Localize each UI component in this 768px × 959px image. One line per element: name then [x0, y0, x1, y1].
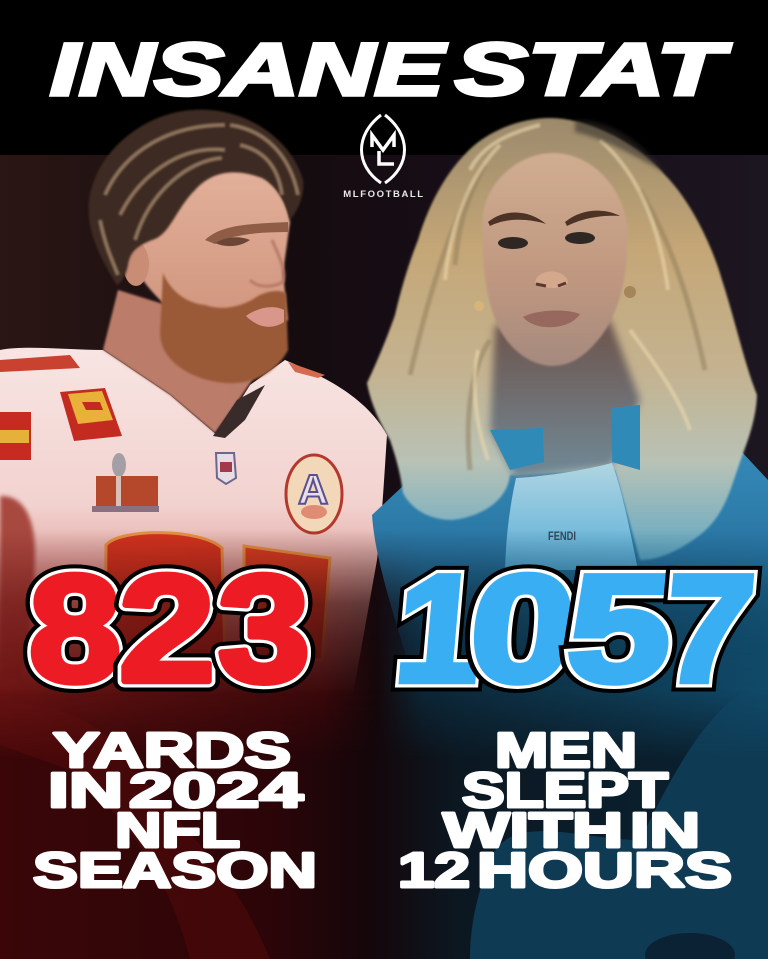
digit 0: 0: [464, 544, 582, 714]
photo: football player: [0, 110, 387, 700]
caption: men: MEN: [495, 724, 637, 778]
caption: yards: YARDS: [53, 724, 291, 778]
player collar: [213, 385, 265, 438]
player hair: [89, 110, 303, 285]
right collar: [611, 405, 640, 470]
caption: yards: [33, 724, 317, 898]
digit 8: 8: [29, 544, 121, 714]
player neck: [103, 290, 280, 433]
nose: [535, 272, 568, 288]
caption: men: IN: [630, 804, 700, 858]
face: [482, 153, 628, 366]
shoulder trim left: [0, 355, 80, 372]
caption: yards: 2024: [129, 764, 303, 818]
player hair highlights: [100, 125, 298, 275]
digit 8: 8: [29, 544, 121, 714]
right eye: [565, 232, 595, 244]
blue background shape: [470, 690, 768, 959]
player nose shadow: [250, 240, 284, 286]
neck shadow: [490, 320, 640, 478]
title: INSANE: [50, 28, 448, 111]
caption: yards: NFL: [115, 804, 240, 858]
caption: yards: SEASON: [33, 844, 317, 898]
photo: woman: [367, 118, 768, 700]
shirt logo: FENDI: [548, 529, 576, 543]
digit 5: 5: [562, 544, 678, 714]
bottom fade: [0, 690, 768, 959]
hair: [367, 118, 757, 560]
digit 8: 8: [29, 544, 121, 714]
digit 1: 1: [390, 544, 488, 714]
stat number: 1057: [390, 544, 760, 714]
digit 0: 0: [464, 544, 582, 714]
title: STAT: [455, 28, 732, 111]
player arm: [0, 496, 35, 680]
digit 3: 3: [218, 544, 310, 714]
left brow: [488, 212, 546, 226]
mid fade: [0, 534, 768, 752]
digit 2: 2: [119, 544, 215, 714]
left collar: [490, 428, 544, 470]
caption: men: 12: [398, 844, 470, 898]
right brow: [565, 211, 620, 226]
player beard: [160, 273, 288, 383]
player eye: [215, 237, 250, 246]
caption: men: [398, 724, 732, 898]
left eye: [498, 237, 528, 249]
digit 3: 3: [218, 544, 310, 714]
shoulder trim right: [288, 362, 325, 378]
digit 7: 7: [658, 544, 760, 714]
player face: [135, 165, 290, 345]
caption: men: WITH: [443, 804, 623, 858]
lips: [523, 310, 580, 327]
top black band: [0, 0, 768, 155]
digit 5: 5: [562, 544, 678, 714]
digit 7: 7: [658, 544, 760, 714]
hair strands dark: [410, 165, 705, 470]
digit 5: 5: [562, 544, 678, 714]
nostrils: [536, 283, 566, 286]
digit 1: 1: [390, 544, 488, 714]
conference patch: [286, 455, 342, 533]
digit 1: 1: [390, 544, 488, 714]
hair strands light: [445, 125, 690, 460]
jersey number first digit: [105, 533, 225, 660]
caption: yards: IN: [48, 764, 123, 818]
earring right: [624, 286, 636, 298]
dark ellipse: [645, 933, 735, 959]
digit 2: 2: [119, 544, 215, 714]
title: [50, 28, 732, 111]
captain patch: [60, 388, 122, 441]
digit 7: 7: [658, 544, 760, 714]
conference patch: A: [298, 466, 328, 513]
jersey number second digit: [244, 546, 330, 660]
shoulder stripe: [0, 412, 31, 460]
logo: [343, 115, 425, 200]
player jersey: [0, 348, 387, 700]
earring left: [474, 301, 484, 311]
player ear: [123, 242, 149, 286]
shirt: [505, 463, 638, 570]
caption: men: HOURS: [477, 844, 732, 898]
player lips: [246, 307, 284, 327]
digit 3: 3: [218, 544, 310, 714]
jacket: [372, 410, 768, 700]
caption: men: SLEPT: [462, 764, 668, 818]
league shield: [216, 453, 236, 484]
hair dark crown: [575, 120, 665, 172]
digit 0: 0: [464, 544, 582, 714]
red background shapes: [0, 704, 270, 959]
digit 2: 2: [119, 544, 215, 714]
Super Bowl logo: [92, 453, 159, 512]
player brow: [205, 222, 288, 244]
stat number: 823: [29, 544, 310, 714]
logo: MLFOOTBALL: [343, 189, 425, 200]
